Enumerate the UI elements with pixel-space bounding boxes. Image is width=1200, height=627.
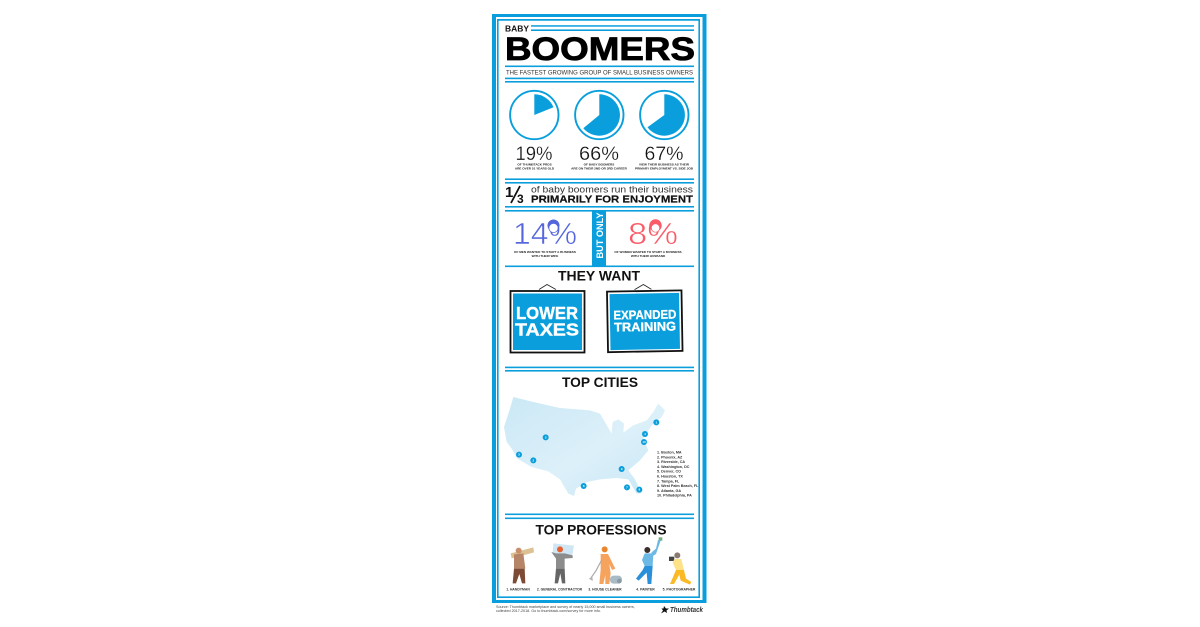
profession labels: 4. PAINTER xyxy=(636,588,655,592)
title: BOOMERS xyxy=(505,31,695,67)
city list: 10. Philadelphia, PA xyxy=(657,494,692,498)
but only banner: BUT ONLY xyxy=(595,212,605,258)
marker numbers: 2 xyxy=(532,458,534,462)
stat: 19 percent xyxy=(510,91,558,170)
city list: 1. Boston, MA xyxy=(657,450,682,454)
marker numbers: 9 xyxy=(621,467,623,471)
stat: 67 percent: 67% xyxy=(644,144,684,165)
stat: 19 percent: 19% xyxy=(516,144,553,165)
one third callout: PRIMARILY FOR ENJOYMENT xyxy=(531,194,693,205)
stat: 66 percent: ARE ON THEIR 2ND OR 3RD CAREER xyxy=(571,166,628,170)
sign: expanded training xyxy=(607,284,683,352)
stat: men 14 percent: OF MEN WANTED TO START A BUSINESS xyxy=(514,250,576,254)
stat: women 8 percent xyxy=(614,216,682,258)
profession labels: 3. HOUSE CLEANER xyxy=(588,588,622,592)
profession labels: 2. GENERAL CONTRACTOR xyxy=(537,588,583,592)
city list: 7. Tampa, FL xyxy=(657,479,680,483)
city list xyxy=(657,450,699,498)
sign: lower taxes xyxy=(510,284,584,352)
marker numbers: 5 xyxy=(545,435,547,439)
stat: 67 percent: PRIMARY EMPLOYMENT VS. SIDE JOB xyxy=(635,166,694,170)
city list: 9. Atlanta, GA xyxy=(657,489,681,493)
stat: 19 percent: OF THUMBTACK PROS xyxy=(517,162,552,166)
professions illustrations xyxy=(511,537,691,585)
stat: 67 percent xyxy=(635,91,694,170)
stat: men 14 percent: WITH THEIR WIFE xyxy=(532,254,558,258)
stat: 67 percent: VIEW THEIR BUSINESS AS THEIR xyxy=(639,162,690,166)
city list: 3. Riverside, CA xyxy=(657,460,685,464)
stat: 66 percent: OF BABY BOOMERS xyxy=(584,162,614,166)
profession labels: 1. HANDYMAN xyxy=(506,588,530,592)
heading: top professions: TOP PROFESSIONS xyxy=(536,522,666,538)
source note: Source: Thumbtack marketplace and survey of nearly 15,000 small business owners, xyxy=(496,605,635,609)
figure: house cleaner xyxy=(589,546,622,584)
figure: handyman xyxy=(511,547,534,583)
stat: women 8 percent: WITH THEIR HUSBAND xyxy=(631,254,666,258)
city list: 4. Washington, DC xyxy=(657,465,690,469)
stat: men 14 percent: 14% xyxy=(513,216,577,251)
thumbtack logo xyxy=(661,606,704,614)
marker numbers xyxy=(518,420,657,492)
profession labels: 5. PHOTOGRAPHER xyxy=(663,588,696,592)
figure: general contractor xyxy=(551,543,574,583)
marker numbers: 7 xyxy=(626,485,628,489)
marker numbers: 6 xyxy=(583,484,585,488)
stat: 66 percent: 66% xyxy=(579,144,619,165)
city list: 8. West Palm Beach, FL xyxy=(657,484,699,488)
city list: 6. Houston, TX xyxy=(657,474,683,478)
city list: 2. Phoenix, AZ xyxy=(657,455,683,459)
icon: woman face xyxy=(649,219,662,232)
sign: expanded training: TRAINING xyxy=(614,319,676,335)
city markers xyxy=(516,419,659,493)
map of the United States xyxy=(504,397,665,496)
one third callout xyxy=(505,178,694,212)
figure: photographer xyxy=(669,552,691,585)
stat: 19 percent: ARE OVER 51 YEARS OLD xyxy=(515,166,555,170)
stat: women 8 percent: OF WOMEN WANTED TO START A BUSINESS xyxy=(614,250,682,254)
title: THE FASTEST GROWING GROUP OF SMALL BUSINESS OWNERS xyxy=(506,69,693,76)
icon: man face xyxy=(548,220,560,233)
marker numbers: 8 xyxy=(638,488,640,492)
title: BABY xyxy=(505,24,530,34)
thumbtack logo: Thumbtack xyxy=(670,607,704,614)
stat: 66 percent xyxy=(571,91,628,170)
city list: 5. Denver, CO xyxy=(657,470,681,474)
marker numbers: 1 xyxy=(655,420,657,424)
marker numbers: 3 xyxy=(518,453,520,457)
source note: collected 2017-2018. Go to thumbtack.com/survey for more info. xyxy=(496,609,601,613)
marker numbers: 10 xyxy=(642,440,646,444)
sign: expanded training: EXPANDED xyxy=(613,307,677,323)
figure: painter xyxy=(636,537,662,584)
outer frame xyxy=(492,14,706,603)
sign: lower taxes: TAXES xyxy=(515,320,579,340)
one third callout: 1 xyxy=(505,184,513,201)
title xyxy=(505,24,695,83)
source note xyxy=(496,605,635,613)
profession labels xyxy=(506,588,696,592)
one third callout: of baby boomers run their business xyxy=(531,184,693,196)
heading: they want: THEY WANT xyxy=(558,267,640,283)
marker numbers: 4 xyxy=(644,432,646,436)
sign: lower taxes: LOWER xyxy=(516,303,578,323)
one third callout: 3 xyxy=(517,192,524,206)
heading: top cities: TOP CITIES xyxy=(562,374,638,390)
stat: women 8 percent: 8% xyxy=(628,216,678,251)
but only banner xyxy=(592,210,606,266)
